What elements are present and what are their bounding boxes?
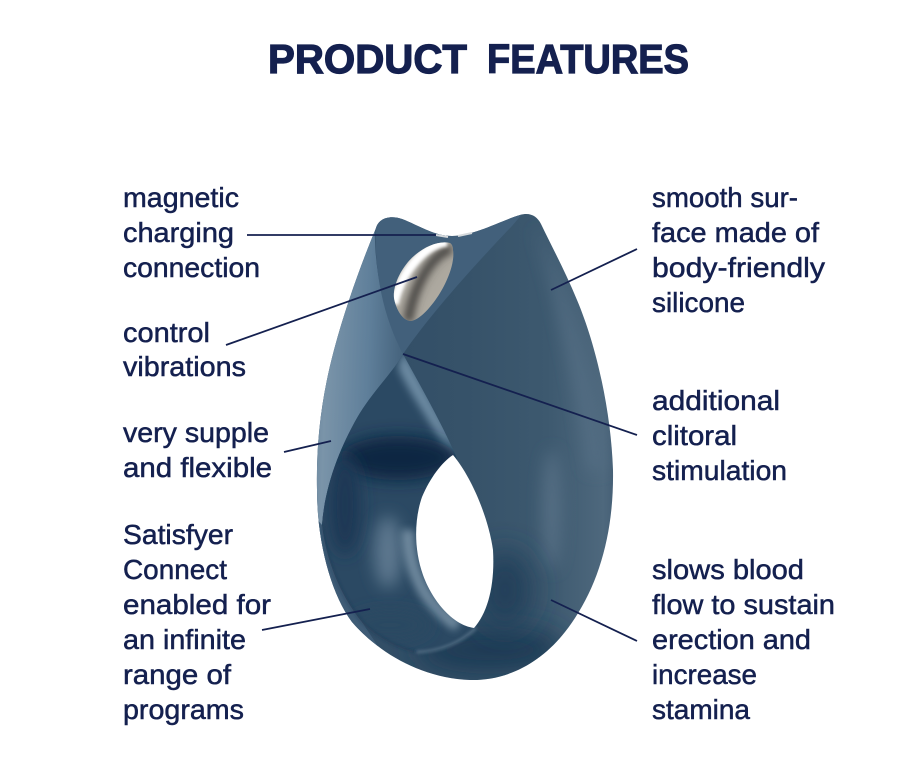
label: Satisfyer Connect: Satisfyer [123,519,233,550]
label: smooth surface: silicone [652,287,745,318]
label: Satisfyer Connect: programs [123,694,244,725]
pointer: Satisfyer Connect [262,609,370,630]
left twisted strip [316,230,403,624]
label: control vibrations [123,317,246,382]
product: ring [316,214,614,680]
top notch facet [375,214,522,354]
ring hole [416,455,493,628]
light wedge beside crossing [394,354,455,455]
label: very supple and flexible [123,417,272,483]
label: slows blood flow: slows blood [652,554,804,585]
pointer: flexible [284,441,331,452]
title [268,36,689,82]
label: additional clitoral stimulation [652,385,787,486]
label: additional clitoral stimulation: stimulation [652,455,787,486]
right edge soft highlight [551,272,586,416]
label: magnetic charging connection: charging [123,217,234,248]
pointer: magnetic charging [247,234,436,236]
label: slows blood flow: flow to sustain [652,589,835,620]
label: slows blood flow: increase [652,659,757,690]
pointer: slows blood flow [551,600,637,641]
label: slows blood flow: stamina [652,694,750,725]
label: slows blood flow [652,554,835,725]
label: smooth surface [652,182,825,318]
label: Satisfyer Connect: enabled for [123,589,271,620]
lower body shadow [415,626,565,674]
pointer: control vibrations [226,277,417,345]
inner ring soft highlight [374,516,402,588]
label: additional clitoral stimulation: clitoral [652,420,737,451]
label: very supple and flexible: very supple [123,417,269,448]
label: magnetic charging connection: magnetic [123,182,239,213]
lower left edge tint [318,521,378,646]
label: magnetic charging connection: connection [123,252,260,283]
label: control vibrations: vibrations [123,351,246,382]
lower left facet and ring band [322,355,468,648]
right body soft highlight [543,450,561,570]
title: FEATURES [487,36,689,82]
metal button [394,242,454,321]
label: smooth surface: face made of [652,217,819,248]
label: control vibrations: control [123,317,210,348]
title: PRODUCT [268,36,467,82]
ring lip [416,628,476,652]
label: very supple and flexible: and flexible [123,452,272,483]
label: magnetic charging connection [123,182,260,283]
label: additional clitoral stimulation: additional [652,385,780,416]
label: Satisfyer Connect: an infinite [123,624,246,655]
pointer: silicone [551,249,637,290]
label: slows blood flow: erection and [652,624,811,655]
label: smooth surface: smooth sur- [652,182,798,213]
pointer: clitoral stimulation [403,354,637,435]
label: Satisfyer Connect: Connect [123,554,227,585]
charging contact [436,233,472,237]
label: smooth surface: body-friendly [652,252,825,283]
label: Satisfyer Connect [123,519,271,725]
dark shadow at top of hole [340,436,456,480]
label: Satisfyer Connect: range of [123,659,231,690]
